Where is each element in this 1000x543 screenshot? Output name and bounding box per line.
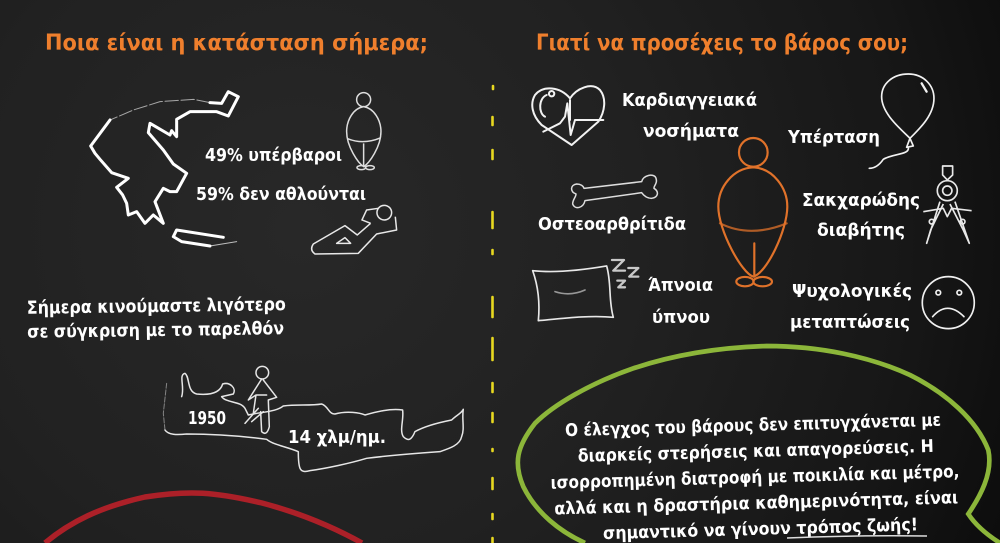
text: cardiovascular diseases bbox=[622, 90, 757, 142]
green bubble outline bbox=[518, 346, 1000, 543]
text: sleep apnea: ύπνου bbox=[652, 307, 710, 328]
text: psychological effects bbox=[790, 281, 912, 333]
icon: compass bbox=[923, 166, 972, 243]
text: 14 km per day: 14 χλμ/ημ. bbox=[288, 427, 386, 448]
text: diabetes: Σακχαρώδης bbox=[802, 190, 920, 211]
icon: balloon bbox=[869, 74, 934, 168]
text: cardiovascular diseases: Καρδιαγγειακά bbox=[622, 90, 757, 111]
text: sleep apnea bbox=[648, 275, 713, 328]
icon: reclining figure bbox=[312, 205, 397, 254]
advice text bbox=[549, 410, 961, 543]
text: diabetes bbox=[802, 190, 920, 241]
text: 59% do not exercise: 59% δεν αθλούνται bbox=[196, 184, 366, 205]
icon: overweight figure bbox=[347, 93, 381, 170]
icon: pillow with Zzz bbox=[533, 260, 638, 321]
text: hypertension: Υπέρταση bbox=[787, 127, 880, 148]
text: sleep apnea: Άπνοια bbox=[648, 275, 713, 296]
icon: map of Greece bbox=[91, 92, 238, 246]
icon: orange overweight figure bbox=[718, 138, 787, 286]
panel: today's situation bbox=[27, 92, 463, 543]
icon: map of Crete with walking figure bbox=[163, 366, 463, 471]
panel: why watch your weight bbox=[518, 74, 1000, 543]
advice text: Ο έλεγχος του βάρους δεν επιτυγχάνεται με bbox=[565, 411, 941, 441]
text: 1950: 1950 bbox=[188, 408, 226, 429]
text: psychological effects: μεταπτώσεις bbox=[790, 312, 910, 333]
text: 49% overweight: 49% υπέρβαροι bbox=[205, 145, 342, 166]
text: psychological effects: Ψυχολογικές bbox=[792, 281, 912, 302]
advice text: διαρκείς στερήσεις και απαγορεύσεις. Η bbox=[578, 437, 934, 467]
underline bbox=[787, 536, 927, 538]
title: current situation: Ποια είναι η κατάσταση σήμερα; bbox=[45, 31, 428, 56]
icon: heart with heartbeat bbox=[532, 86, 604, 145]
callout: green speech bubble bbox=[518, 346, 1000, 543]
title: why watch your weight: Γιατί να προσέχεις το βάρος σου; bbox=[536, 31, 908, 56]
icon: sad face bbox=[922, 277, 974, 329]
text: we move less today: Σήμερα κινούμαστε λιγότερο bbox=[27, 294, 286, 319]
icon: bone bbox=[572, 175, 657, 208]
dashed vertical divider bbox=[491, 86, 494, 543]
text: we move less today: σε σύγκριση με το παρελθόν bbox=[27, 318, 284, 343]
advice text: αλλά και η δραστήρια καθημερινότητα, είναι bbox=[554, 488, 959, 519]
text: diabetes: διαβήτης bbox=[817, 220, 905, 241]
text: osteoarthritis: Οστεοαρθρίτιδα bbox=[538, 214, 686, 235]
text: cardiovascular diseases: νοσήματα bbox=[643, 121, 739, 142]
text: we move less today bbox=[27, 294, 286, 343]
red speech bubble arc bbox=[45, 493, 362, 543]
